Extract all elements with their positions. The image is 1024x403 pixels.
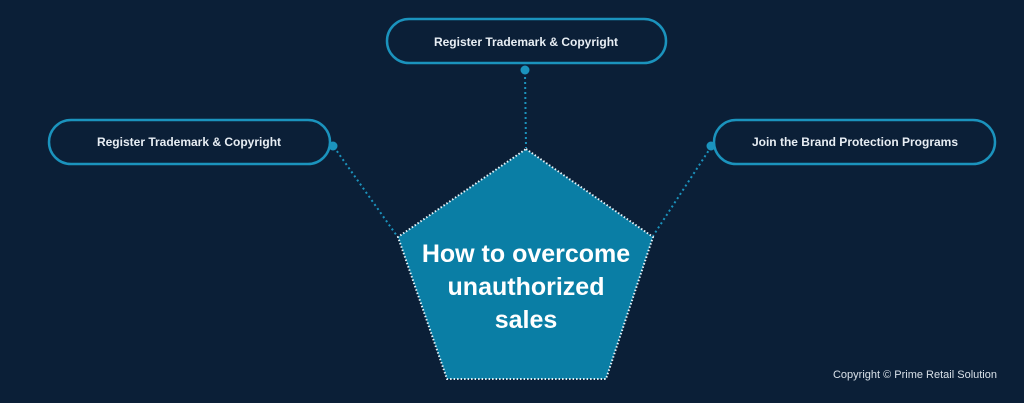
copyright: Copyright © Prime Retail Solution — [833, 369, 997, 381]
pill: left: Register Trademark & Copyright — [97, 135, 281, 149]
pentagon title: sales — [495, 306, 557, 334]
central pentagon — [398, 149, 653, 379]
pill: right: Join the Brand Protection Programs — [752, 135, 958, 149]
dot: top — [520, 66, 530, 74]
connector: top — [525, 72, 526, 148]
pill: top — [387, 19, 666, 63]
pentagon title: unauthorized — [448, 273, 604, 301]
pill: right — [714, 120, 995, 164]
connector: left — [334, 147, 397, 236]
connector: right — [653, 147, 711, 236]
pill: left — [49, 120, 330, 164]
dot: left — [328, 142, 338, 150]
pentagon title: How to overcome — [422, 240, 630, 268]
dot: right — [706, 142, 716, 150]
pill: top: Register Trademark & Copyright — [434, 35, 618, 49]
